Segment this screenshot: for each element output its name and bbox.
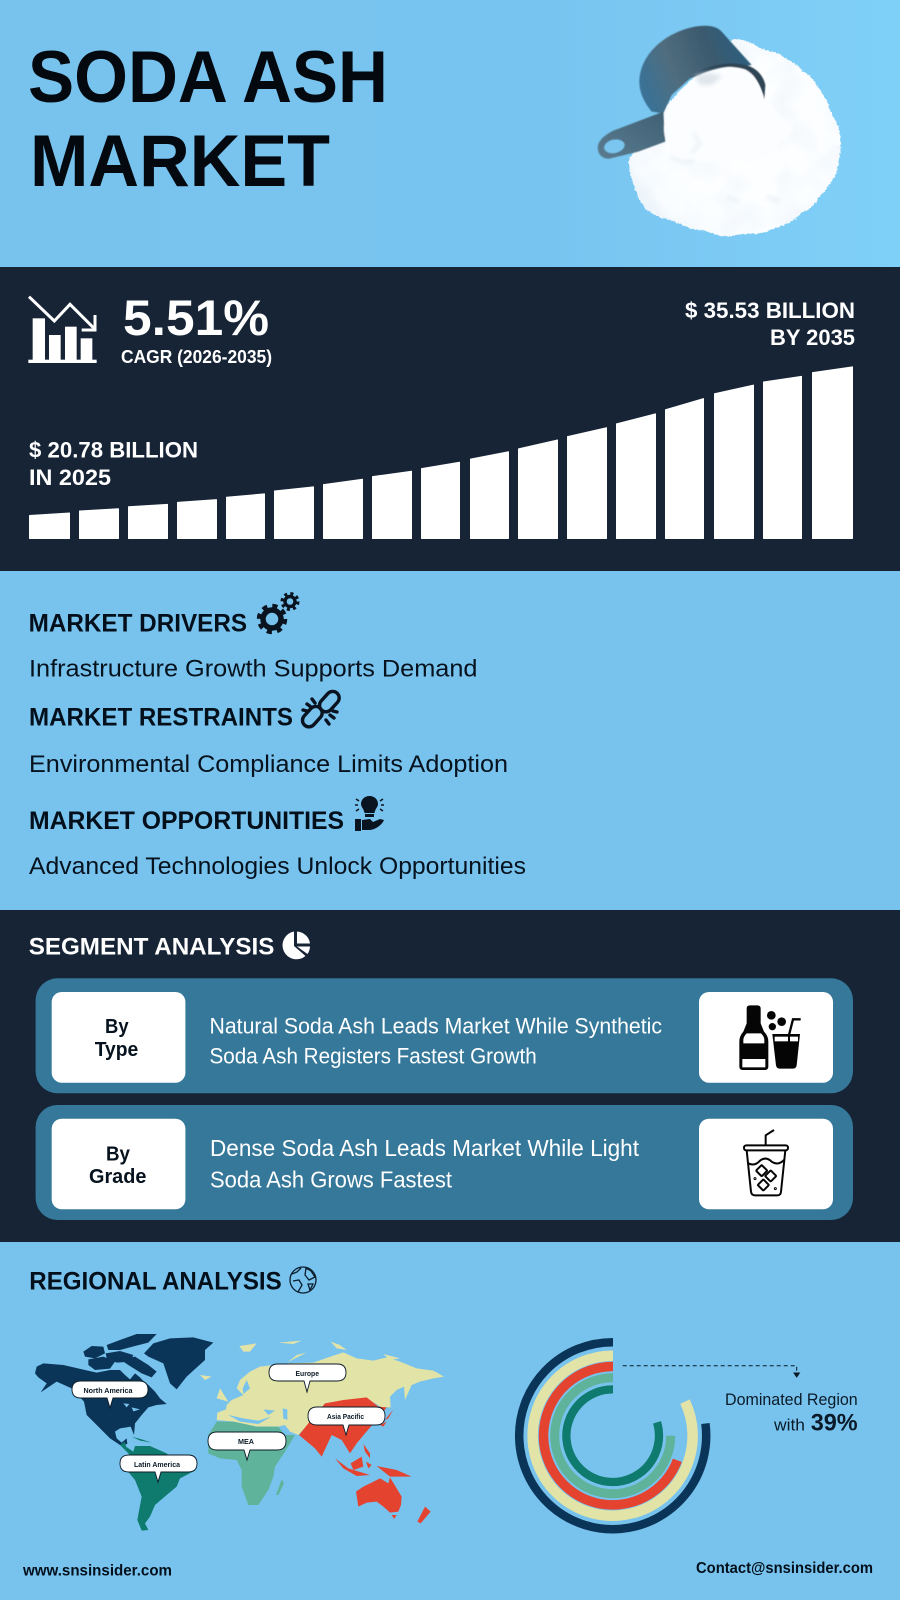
callout: North America [72,1381,148,1408]
callout: dominated region share: 39% [811,1410,858,1437]
callout: Latin America: Latin America [134,1462,180,1469]
radial bar chart: regional share [519,1342,706,1529]
title: MARKET [30,121,330,202]
icon: pie chart [283,932,310,959]
text: type finding [210,1013,662,1068]
card: by type [36,978,853,1093]
label box: by grade: Grade [89,1166,146,1188]
text: opportunity: Advanced Technologies Unlock Opportunities [29,853,526,880]
icon: gears [259,594,298,632]
region: North America [35,1334,213,1445]
text: grade finding [210,1135,640,1193]
bar chart: growth [30,367,852,538]
label box: by type [52,992,185,1083]
callout: dominated region share [725,1391,858,1437]
forecast value: $ 35.53 BILLION [685,298,855,323]
callout: Asia Pacific [308,1407,385,1435]
region: Asia Pacific [299,1397,431,1523]
callout: dominated region share: with [773,1417,805,1435]
icon: broken chain [300,689,342,730]
world map [35,1334,444,1531]
callout: Asia Pacific: Asia Pacific [327,1414,364,1421]
panel: regional analysis [29,1267,858,1531]
text: type finding: Natural Soda Ash Leads Market While Synthetic [210,1013,662,1038]
CAGR label: CAGR (2026-2035) [121,347,272,367]
heading: market restraints: MARKET RESTRAINTS [29,704,293,732]
label box: by grade: By [106,1144,131,1166]
text: driver: Infrastructure Growth Supports Demand [29,656,478,683]
panel: segment analysis [0,910,900,1242]
callout: MEA: MEA [238,1439,254,1446]
region: Latin America [120,1437,195,1531]
region: Middle East and Africa [208,1422,295,1505]
icon box: bottle and drink [699,992,833,1083]
text: restraint: Environmental Compliance Limits Adoption [29,751,508,778]
forecast value: BY 2035 [770,325,855,350]
label box: by type: Type [95,1039,138,1061]
callout: Europe: Europe [296,1371,319,1378]
panel: market dynamics [29,594,526,880]
CAGR value: 5.51% [123,290,269,346]
title [28,37,388,202]
icon: hand holding light bulb [355,796,384,831]
footer: contact email: Contact@snsinsider.com [696,1560,873,1577]
base value [29,438,198,490]
callout: MEA [208,1432,286,1460]
callout: Latin America [120,1455,197,1482]
image: scoop of white powder [598,26,839,236]
icon: globe [290,1267,316,1293]
text: grade finding: Dense Soda Ash Leads Market While Light [210,1135,640,1161]
heading: market opportunities: MARKET OPPORTUNITIES [29,807,344,835]
panel: market size and CAGR [0,267,900,571]
callout: North America: North America [84,1388,133,1395]
header panel [0,0,900,267]
footer: website: www.snsinsider.com [22,1563,172,1580]
text: type finding: Soda Ash Registers Fastest Growth [210,1043,537,1068]
icon box: iced drink [699,1119,833,1209]
title: SODA ASH [28,37,388,118]
heading: market drivers: MARKET DRIVERS [29,610,247,638]
heading: segment analysis: SEGMENT ANALYSIS [29,933,274,960]
text: grade finding: Soda Ash Grows Fastest [210,1167,453,1193]
icon: declining chart [28,297,97,363]
label box: by type: By [105,1016,129,1038]
base value: $ 20.78 BILLION [29,438,198,462]
heading: regional analysis: REGIONAL ANALYSIS [29,1267,282,1295]
base value: IN 2025 [29,465,111,490]
label box: by grade [52,1119,185,1209]
callout: dominated region share: Dominated Region [725,1391,858,1409]
card: by grade [36,1105,853,1220]
callout: Europe [269,1364,346,1392]
forecast value [685,298,855,350]
region: Europe [200,1341,444,1435]
arrow: dashed leader to dominated region [623,1366,799,1377]
